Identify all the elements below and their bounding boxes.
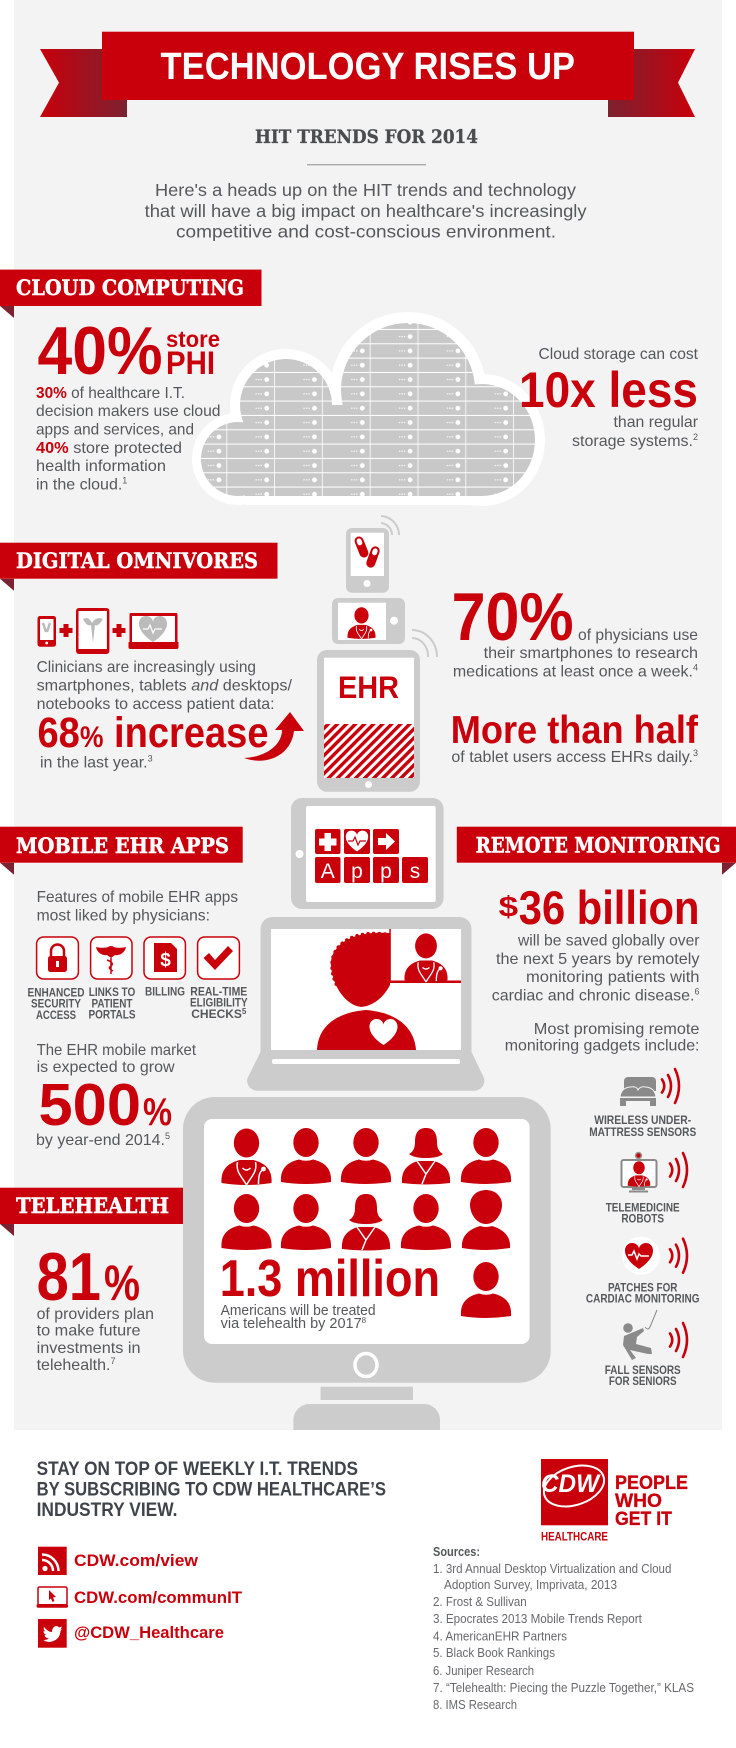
gadget: mattress sensor: MATTRESS SENSORS	[589, 1125, 696, 1139]
link: twitter: @CDW_Healthcare	[74, 1623, 224, 1642]
stat: 81%: investments in	[37, 1340, 141, 1357]
gadget: mattress sensor	[589, 1069, 696, 1139]
stat: 500%: 5	[165, 1131, 170, 1141]
stat: 500%: is expected to grow	[37, 1059, 175, 1076]
stat: 40% store PHI: store	[166, 326, 220, 352]
stat: 10x less: 10x less	[519, 362, 698, 418]
stat: $36 billion: monitoring gadgets include:	[505, 1038, 700, 1055]
text: features intro	[37, 889, 238, 925]
logo: CDW Healthcare: GET IT	[615, 1509, 672, 1530]
feature labels	[28, 985, 248, 1022]
feature labels: SECURITY	[31, 997, 81, 1011]
stat: 70%: their smartphones to research	[484, 645, 698, 662]
feature labels: PORTALS	[88, 1008, 136, 1022]
device: laptop with patient and doctor	[247, 917, 484, 1091]
stat: 81%: of providers plan	[37, 1306, 154, 1323]
device: small tablet with doctor	[332, 598, 437, 657]
icon: billing document	[144, 937, 185, 979]
section tab: cloud computing	[0, 270, 262, 318]
stat: 70%: 4	[693, 663, 698, 673]
device: apps tablet: A	[321, 860, 335, 883]
section tab: mobile EHR apps: MOBILE EHR APPS	[16, 833, 229, 858]
icon: checkmark	[198, 937, 239, 979]
stat: 81%: to make future	[37, 1323, 141, 1340]
stat: 1.3 million: Americans will be treated	[221, 1303, 376, 1319]
gadget: fall sensor: FOR SENIORS	[609, 1374, 676, 1388]
stat: 81%: 81	[37, 1239, 101, 1315]
footer call to action: INDUSTRY VIEW.	[37, 1500, 177, 1521]
stat: $36 billion: Most promising remote	[534, 1021, 700, 1038]
subtitle: HIT TRENDS FOR 2014	[255, 126, 478, 148]
device: apps tablet: p	[351, 860, 363, 883]
stat: 70%: medications at least once a week.	[453, 664, 693, 681]
device: apps tablet: p	[380, 860, 392, 883]
people grid	[221, 1128, 511, 1318]
device: apps tablet	[291, 798, 444, 909]
gadget: telemedicine robot	[606, 1152, 687, 1226]
section tab: mobile EHR apps	[0, 827, 243, 875]
stat: $36 billion: the next 5 years by remotely	[496, 951, 700, 968]
stat: $36 billion: monitoring patients with	[526, 969, 700, 986]
text: cloud adoption: 30% of healthcare I.T.	[36, 385, 185, 402]
stat: 68% increase: 68% increase	[38, 709, 268, 757]
stat: 500%: by year-end 2014.	[36, 1132, 165, 1149]
section tab: remote monitoring	[457, 827, 736, 875]
stat: 1.3 million: 1.3 million	[220, 1250, 440, 1308]
text: clinicians	[37, 659, 293, 713]
stat: $36 billion: 6	[694, 987, 700, 997]
gadget: fall sensor: FALL SENSORS	[605, 1363, 681, 1377]
text: clinicians: Clinicians are increasingly using	[37, 659, 256, 676]
stat: $36 billion: will be saved globally over	[517, 933, 700, 950]
link: twitter	[38, 1619, 224, 1648]
sources list: Adoption Survey, Imprivata, 2013	[444, 1578, 617, 1592]
device: EHR tablet	[317, 650, 420, 792]
stat: 10x less: 2	[693, 432, 698, 442]
link: RSS: CDW.com/view	[74, 1551, 199, 1570]
text: cloud adoption	[36, 385, 220, 494]
sources list: 8. IMS Research	[433, 1698, 517, 1712]
stat: 500%: The EHR mobile market	[37, 1042, 197, 1059]
text: cloud adoption: health information	[36, 458, 166, 475]
intro text: that will have a big impact on healthcare's increasingly	[145, 201, 587, 221]
gadget: cardiac patch	[586, 1237, 700, 1306]
footer call to action	[37, 1459, 386, 1521]
sources list: 5. Black Book Rankings	[433, 1646, 555, 1660]
text: clinicians: smartphones, tablets and desktops/	[37, 678, 293, 695]
sources list: 7. “Telehealth: Piecing the Puzzle Together,” KLAS	[433, 1681, 694, 1695]
page background panel	[14, 0, 722, 1430]
stat: 500%	[36, 1042, 197, 1149]
stat: 68% increase: 3	[148, 754, 153, 764]
stat: 1.3 million: via telehealth by 2017	[221, 1316, 362, 1332]
logo: CDW Healthcare	[539, 1458, 688, 1544]
stat: 70%	[452, 579, 698, 681]
stat: $36 billion: $	[499, 892, 518, 924]
gadget: telemedicine robot: ROBOTS	[621, 1212, 664, 1226]
device: apps tablet: s	[410, 860, 420, 883]
feature labels: ACCESS	[36, 1008, 76, 1022]
intro text: competitive and cost-conscious environment.	[176, 222, 556, 242]
arrow: upward swoosh	[244, 712, 304, 761]
stat: $36 billion: 36 billion	[519, 881, 700, 934]
sources list: 4. AmericanEHR Partners	[433, 1630, 567, 1644]
footer call to action: BY SUBSCRIBING TO CDW HEALTHCARE’S	[37, 1480, 386, 1501]
text: features intro: Features of mobile EHR apps	[37, 889, 238, 906]
link: communIT: CDW.com/communIT	[74, 1588, 243, 1607]
stat: $36 billion	[492, 881, 700, 1055]
stat: 10x less: Cloud storage can cost	[538, 346, 699, 363]
stat: 81%: 7	[110, 1356, 115, 1366]
footer call to action: STAY ON TOP OF WEEKLY I.T. TRENDS	[37, 1459, 358, 1480]
stat: 500%: 500	[38, 1072, 141, 1138]
text: cloud adoption: apps and services, and	[36, 422, 194, 439]
title: TECHNOLOGY RISES UP	[160, 46, 575, 88]
feature labels: REAL-TIME	[190, 985, 247, 999]
stat: 70%: of physicians use	[578, 627, 698, 644]
sources list	[433, 1545, 694, 1712]
sources list: Sources:	[433, 1545, 480, 1559]
stat: 68% increase: in the last year.	[40, 755, 148, 772]
text: cloud adoption: decision makers use cloud	[36, 403, 220, 420]
stat: 10x less: storage systems.	[572, 433, 693, 450]
section tab: telehealth	[0, 1188, 188, 1236]
icon: caduceus	[91, 937, 132, 979]
feature labels: BILLING	[145, 985, 185, 999]
stat: 1.3 million	[220, 1250, 440, 1332]
logo: CDW Healthcare: HEALTHCARE	[541, 1530, 608, 1544]
icons: phone + tablet + laptop	[38, 608, 178, 654]
stat: 500%: %	[143, 1091, 172, 1134]
icon: billing document: $	[160, 950, 171, 971]
text: cloud adoption: 40% store protected	[36, 440, 182, 457]
text: cloud adoption: in the cloud.	[36, 477, 122, 494]
logo: CDW Healthcare: CDW	[541, 1470, 601, 1498]
stat: 81%: telehealth.	[37, 1357, 110, 1374]
stat: 40% store PHI: 40%	[38, 313, 162, 389]
device: EHR tablet: EHR	[338, 669, 399, 705]
section tab: telehealth: TELEHEALTH	[16, 1193, 169, 1218]
text: cloud adoption: 1	[122, 476, 127, 486]
device: desktop monitor	[183, 1097, 551, 1430]
gadget: fall sensor	[605, 1310, 687, 1388]
intro text	[145, 180, 587, 242]
device: phone with pills	[346, 516, 399, 593]
logo: CDW Healthcare: WHO	[615, 1491, 662, 1512]
stat: 81%: %	[104, 1255, 140, 1311]
sources list: 2. Frost & Sullivan	[433, 1595, 527, 1609]
stat: 40% store PHI: PHI	[166, 345, 215, 381]
stat: 10x less: than regular	[614, 414, 699, 431]
sources list: 3. Epocrates 2013 Mobile Trends Report	[433, 1612, 642, 1626]
icon: lock	[37, 937, 78, 979]
link: RSS	[38, 1547, 199, 1575]
feature labels: ELIGIBILITY	[190, 996, 248, 1010]
section tab: digital omnivores	[0, 543, 278, 591]
text: clinicians: notebooks to access patient data:	[37, 696, 275, 713]
text: features intro: most liked by physicians:	[37, 908, 210, 925]
section tab: cloud computing: CLOUD COMPUTING	[16, 275, 244, 300]
gadget: mattress sensor: WIRELESS UNDER-	[594, 1113, 691, 1127]
stat: more than half: More than half	[451, 709, 699, 752]
stat: 70%: 70%	[452, 579, 574, 655]
feature labels: ENHANCED	[28, 986, 85, 1000]
feature labels: PATIENT	[92, 997, 133, 1011]
sources list: 1. 3rd Annual Desktop Virtualization and Cloud	[433, 1562, 671, 1576]
intro text: Here's a heads up on the HIT trends and technology	[155, 180, 576, 200]
feature labels: 5	[242, 1007, 247, 1016]
logo: CDW Healthcare: PEOPLE	[615, 1473, 688, 1494]
feature labels: LINKS TO	[89, 985, 135, 999]
title banner	[40, 32, 695, 117]
stat: 81%	[37, 1239, 154, 1374]
gadget: cardiac patch: CARDIAC MONITORING	[586, 1292, 700, 1306]
stat: $36 billion: cardiac and chronic disease.	[492, 988, 694, 1005]
sources list: 6. Juniper Research	[433, 1664, 534, 1678]
stat: 10x less	[519, 346, 699, 450]
cloud illustration with server racks	[191, 312, 545, 506]
stat: more than half: of tablet users access EHRs daily.	[451, 749, 693, 766]
gadget: cardiac patch: PATCHES FOR	[608, 1281, 678, 1295]
stat: 1.3 million: 8	[362, 1316, 367, 1325]
section tab: digital omnivores: DIGITAL OMNIVORES	[16, 548, 258, 573]
gadget: telemedicine robot: TELEMEDICINE	[606, 1201, 680, 1215]
stat: more than half: 3	[693, 748, 698, 758]
feature labels: CHECKS	[191, 1007, 242, 1021]
